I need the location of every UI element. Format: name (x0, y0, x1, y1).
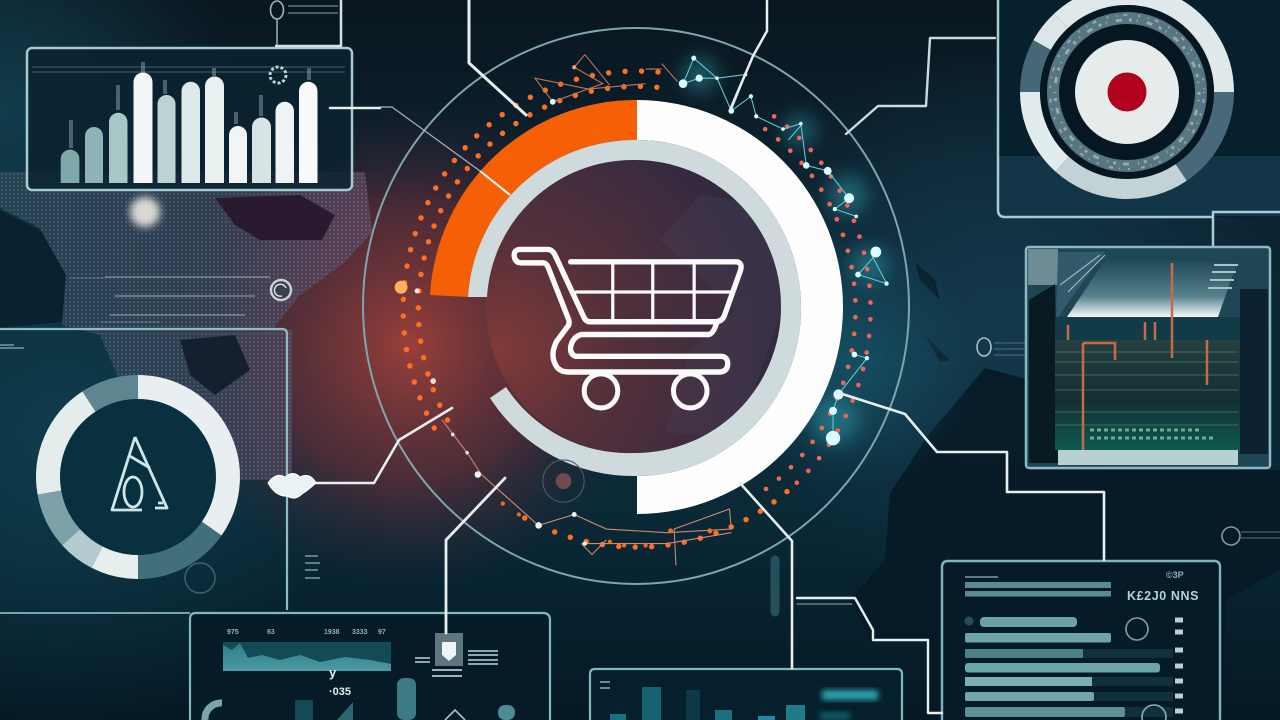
lower bars (397, 678, 416, 720)
constellation: top left (535, 55, 678, 102)
side text lines (415, 651, 498, 664)
area chart (223, 642, 391, 671)
disc map texture (660, 195, 785, 440)
world map backdrop (0, 172, 1280, 720)
panel: area chart dashboard: 3333 (352, 629, 368, 636)
bullseye (1075, 40, 1179, 144)
knot node (268, 474, 316, 498)
small figures: 975 (227, 629, 239, 636)
constellation: teal top (683, 58, 887, 438)
central gauge (363, 28, 1000, 584)
panel: area chart dashboard: 97 (378, 629, 386, 636)
teal node glow (682, 57, 888, 444)
dark and speckled rings (1040, 5, 1214, 179)
connector: bar chart top (270, 0, 341, 46)
panel: factory image (1026, 212, 1280, 468)
horizontal bars (980, 617, 1077, 627)
panel: bottom right bars (942, 561, 1220, 720)
donut ring (48, 387, 228, 567)
orange arc divider (480, 171, 510, 195)
panel: area chart dashboard: 63 (267, 629, 275, 636)
panel: area chart dashboard: 1938 (324, 629, 340, 636)
outer thin circle (363, 28, 909, 584)
panel: bar chart (27, 48, 352, 190)
panel: bottom right bars: ©3P (1166, 570, 1184, 580)
panel: area chart dashboard: y (329, 665, 337, 680)
grey arc (468, 140, 801, 476)
title lines (965, 576, 998, 578)
icon: letter A (112, 437, 167, 510)
orange arc (430, 100, 637, 297)
panel: area chart dashboard (190, 613, 550, 720)
panel: area chart dashboard: ·035 (329, 686, 351, 698)
inner disc (486, 159, 782, 455)
panel: target gauge (998, 0, 1280, 217)
dotted arcs (403, 71, 871, 547)
tracks (1083, 649, 1173, 717)
outer segmented ring (1030, 0, 1224, 189)
panel: donut with icon (0, 329, 320, 613)
icon: small seal (556, 473, 571, 489)
ring nodes (395, 55, 889, 565)
constellation: bottom (442, 420, 731, 565)
bars (61, 73, 317, 183)
icon: shield card (432, 633, 463, 676)
panel: bottom center chart (590, 669, 902, 720)
white arc (637, 100, 843, 514)
panel: bottom right bars: K£2J0 NNS (1127, 589, 1199, 603)
icon: shopping cart (514, 249, 741, 408)
connector lines (268, 0, 1104, 713)
